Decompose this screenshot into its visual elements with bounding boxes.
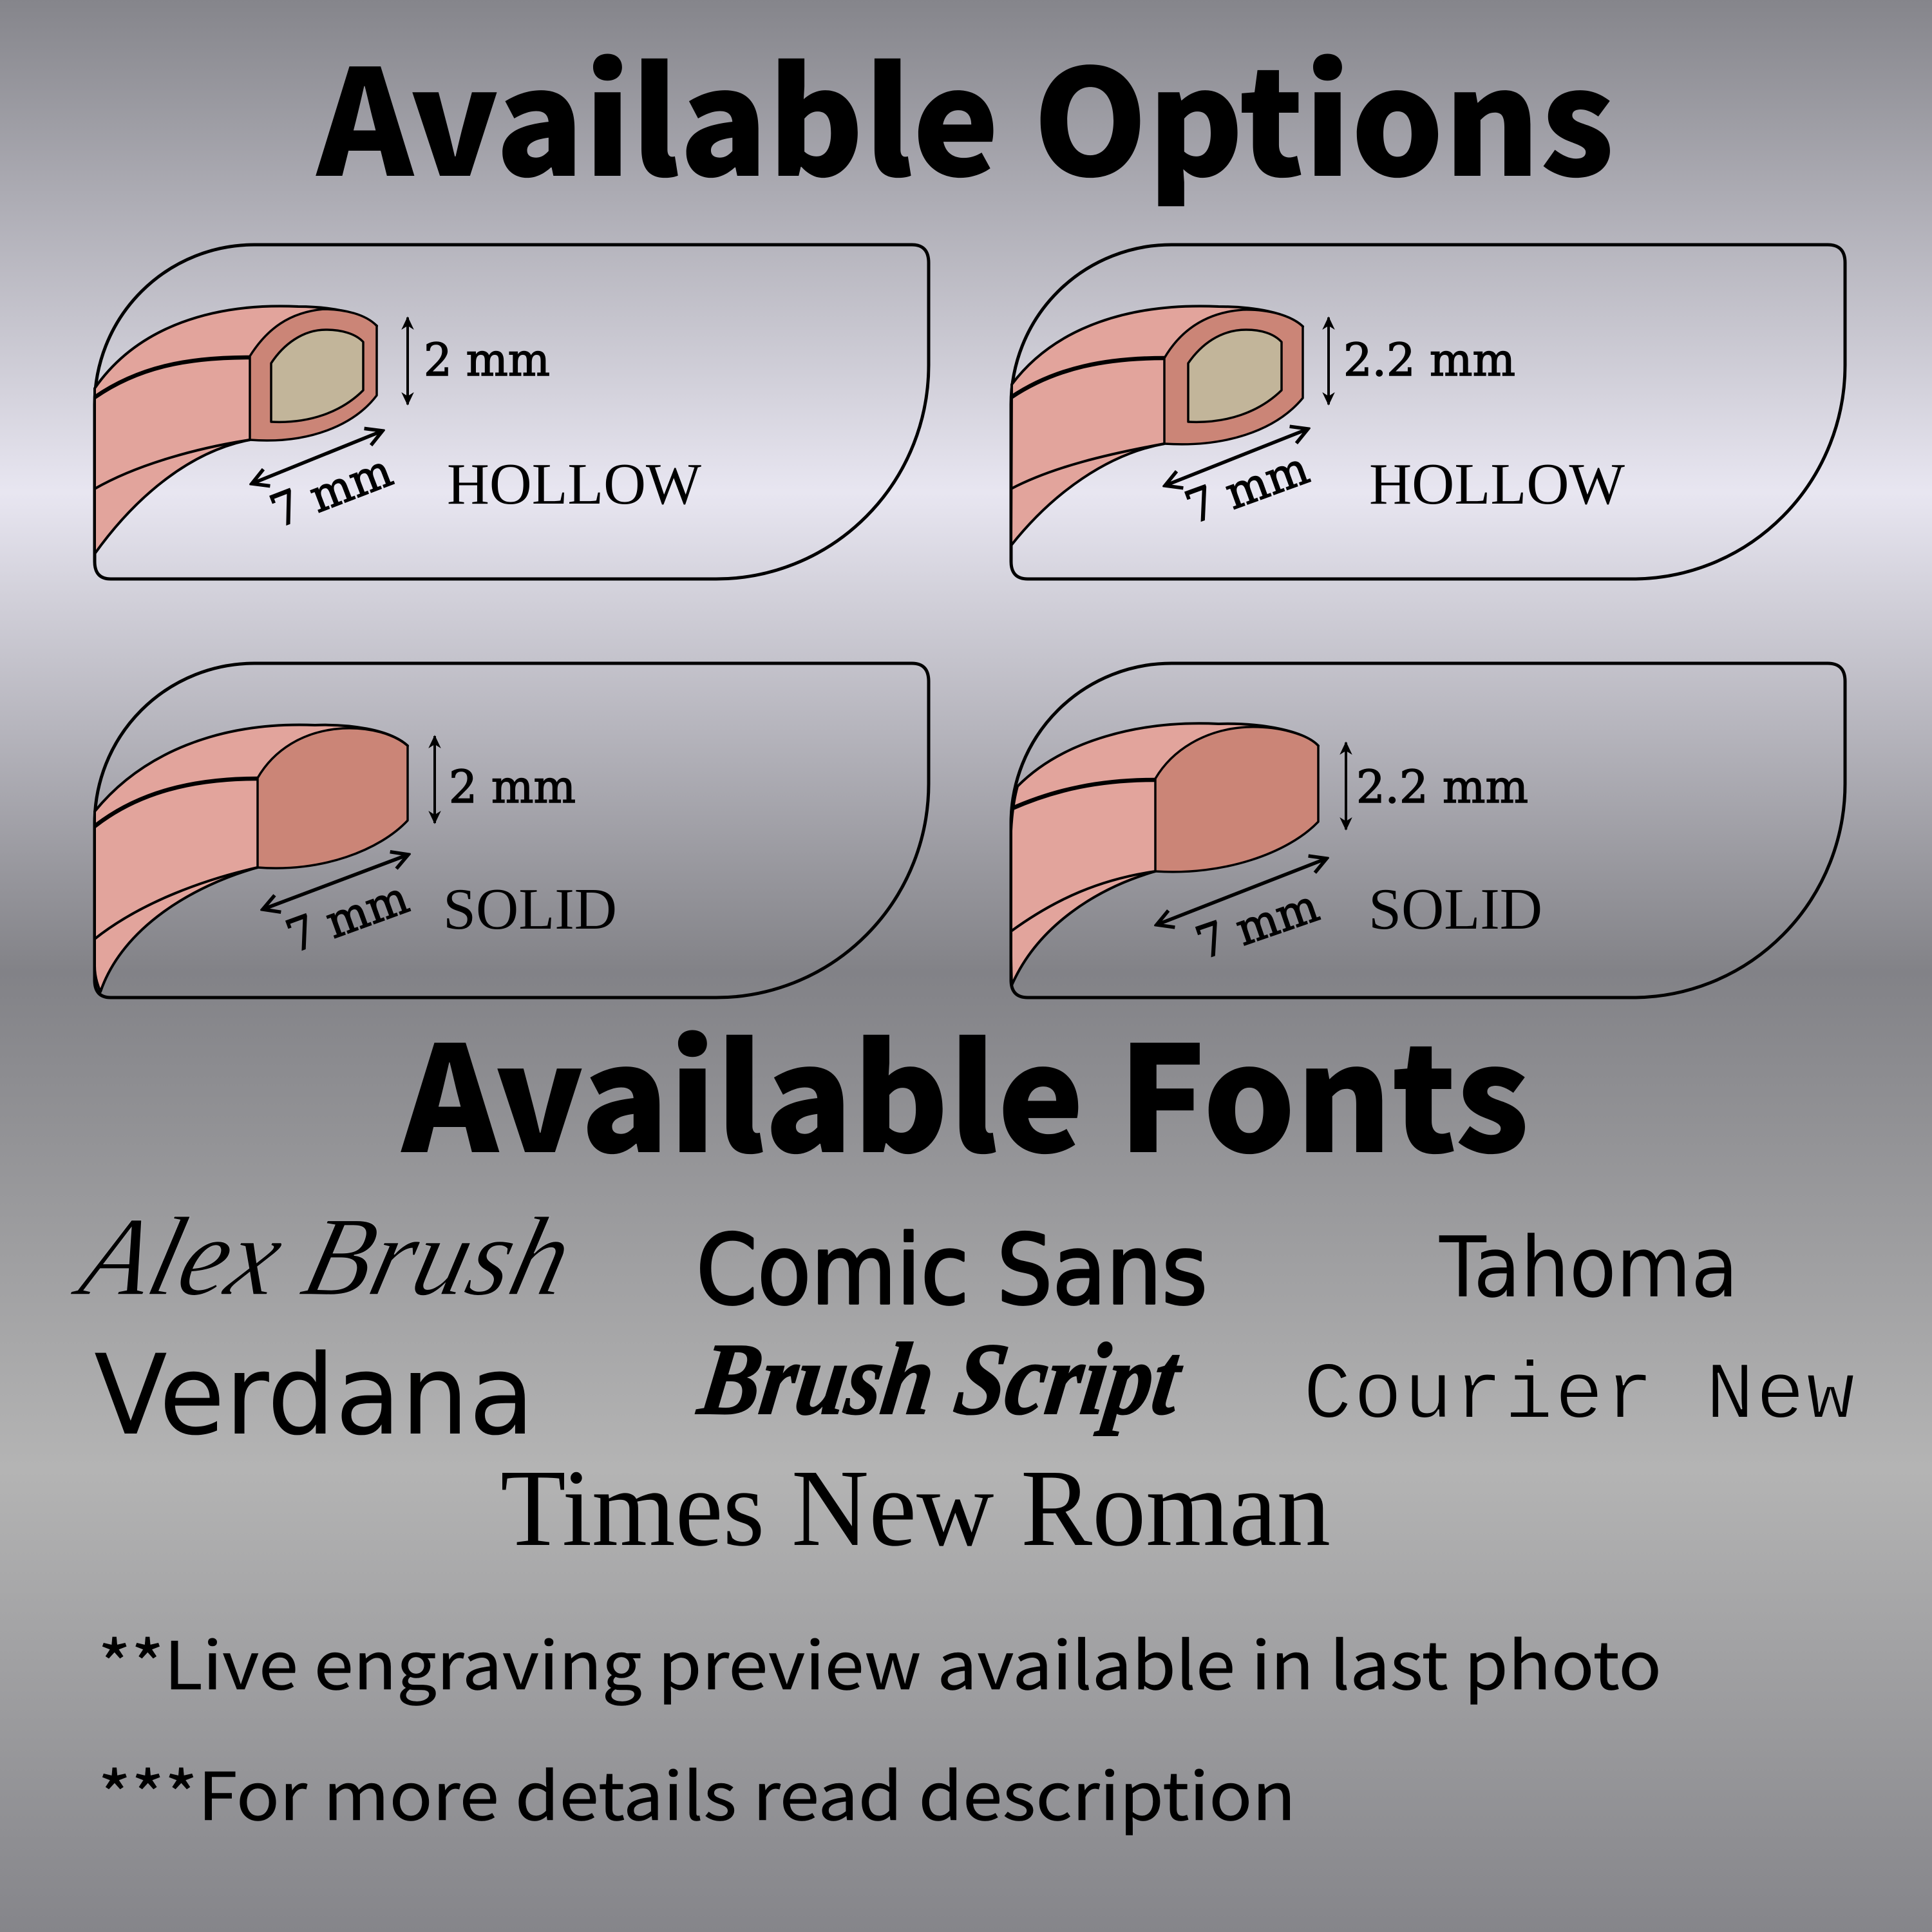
ring band: [1011, 306, 1303, 545]
note: live engraving preview: **Live engraving preview available in last photo: [98, 1614, 1662, 1709]
height arrow: [433, 736, 436, 823]
font sample: Tahoma: Tahoma: [1439, 1218, 1738, 1316]
font sample: Verdana: Verdana: [94, 1331, 535, 1460]
band lower line: [95, 440, 250, 489]
label: HOLLOW: HOLLOW: [1369, 451, 1625, 516]
ring band: [95, 306, 377, 554]
width arrow: [1165, 429, 1308, 486]
title: Available Options: Available Options: [316, 6, 1615, 218]
band mid line: [1011, 780, 1155, 809]
width arrow: [1157, 858, 1327, 925]
note: more details: ***For more details read description: [98, 1745, 1296, 1839]
panel outline: [95, 245, 929, 579]
band mid line: [95, 357, 250, 397]
ring cross-section: [1164, 310, 1303, 444]
font sample: Alex Brush: Alex Brush: [64, 1195, 584, 1319]
label: 2.2 mm: 2.2 mm: [1343, 334, 1515, 386]
label: SOLID: SOLID: [443, 876, 617, 942]
panel outline: [1011, 663, 1845, 998]
panel: hollow 2 mm: [95, 245, 929, 579]
font sample: Brush Script: Brush Script: [692, 1322, 1189, 1436]
width arrow: [252, 431, 383, 484]
hollow centre: [271, 330, 363, 422]
hollow centre: [1188, 330, 1282, 422]
height arrow: [1327, 317, 1330, 404]
ring band: [95, 725, 408, 992]
ring cross-section: [258, 728, 408, 868]
panel outline: [1011, 245, 1845, 579]
label: SOLID: SOLID: [1368, 876, 1542, 942]
height arrow: [1345, 743, 1347, 829]
panel outline: [95, 663, 929, 998]
label: 2 mm: 2 mm: [449, 761, 576, 813]
ring band: [1011, 723, 1318, 985]
height arrow: [406, 317, 409, 404]
label: 2 mm: 2 mm: [424, 334, 550, 386]
label: 7 mm: 7 mm: [1189, 879, 1325, 970]
label: 7 mm: 7 mm: [279, 871, 415, 963]
ring cross-section: [250, 309, 377, 440]
ring cross-section: [1155, 727, 1318, 872]
label: 2.2 mm: 2.2 mm: [1356, 761, 1528, 813]
label: 7 mm: 7 mm: [1179, 442, 1316, 535]
band lower line: [1011, 444, 1164, 489]
font sample: Comic Sans: Comic Sans: [696, 1215, 1208, 1327]
width arrow: [263, 855, 408, 909]
band mid line: [95, 779, 258, 826]
band lower line: [95, 867, 258, 939]
band lower line: [1011, 871, 1155, 931]
panel: solid 2 mm: [95, 663, 929, 998]
panel: hollow 2.2 mm: [1011, 245, 1845, 579]
band mid line: [1011, 358, 1164, 397]
panel: solid 2.2 mm: [1011, 663, 1845, 998]
heading: Available Fonts: Available Fonts: [401, 982, 1530, 1195]
font sample: Courier New: Courier New: [1303, 1350, 1855, 1442]
font sample: Times New Roman: Times New Roman: [500, 1447, 1331, 1569]
label: 7 mm: 7 mm: [263, 444, 399, 538]
label: HOLLOW: HOLLOW: [447, 451, 701, 516]
